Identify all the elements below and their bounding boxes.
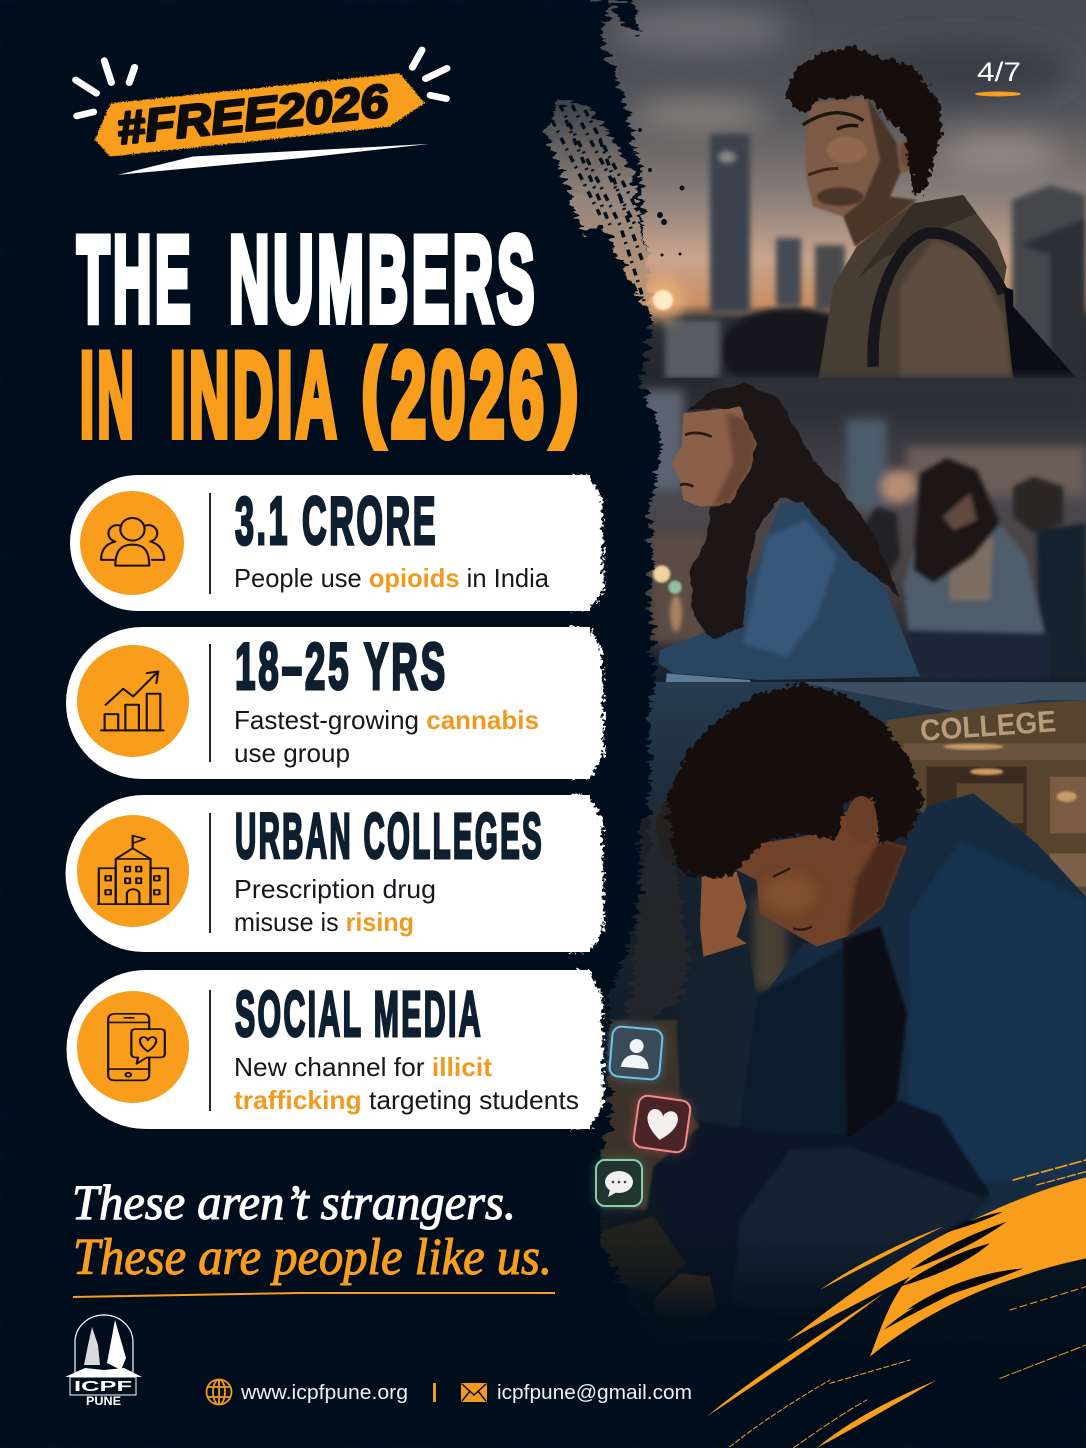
photo: young woman and friends <box>600 377 1086 710</box>
divider <box>209 813 211 933</box>
website: www.icpfpune.org <box>240 1382 408 1404</box>
stat heading: 3.1 CRORE <box>235 483 438 559</box>
description: use group <box>234 738 350 768</box>
logo: ICPF Pune <box>65 1315 142 1408</box>
title: NUMBERS <box>229 211 538 347</box>
divider <box>209 644 211 762</box>
separator <box>433 1383 436 1402</box>
description: trafficking targeting students <box>234 1085 579 1115</box>
icon: envelope <box>461 1383 487 1402</box>
hair <box>687 383 900 640</box>
title line 2: ( <box>362 327 385 448</box>
card: 18-25 yrs <box>66 627 604 779</box>
text: page number: 4/7 <box>977 57 1021 87</box>
description <box>234 874 436 937</box>
icon: neon profile <box>609 1026 663 1080</box>
blurred friends <box>1037 523 1086 677</box>
arm and hand <box>700 872 747 957</box>
hoodie <box>818 195 1078 380</box>
title line 2: ) <box>552 327 578 448</box>
tagline <box>72 1174 555 1298</box>
hashtag text: #FREE2026 <box>114 74 391 154</box>
logo subtext: PUNE <box>86 1394 121 1408</box>
description: Fastest-growing cannabis <box>234 705 539 735</box>
title line 1: THE <box>77 211 194 347</box>
stat heading: 18–25 YRS <box>235 629 448 703</box>
icon: college building <box>77 815 189 927</box>
icon: growth chart <box>77 645 189 757</box>
text: college sign: COLLEGE <box>919 705 1057 748</box>
orange brush stroke <box>707 1160 1086 1448</box>
face <box>805 97 925 247</box>
light brush band <box>800 682 1086 712</box>
face <box>672 407 757 507</box>
card: urban colleges <box>66 795 604 952</box>
title line 2: INDIA <box>170 328 340 462</box>
light brush wedge <box>545 100 652 320</box>
description <box>234 705 539 768</box>
description: Prescription drug <box>234 874 436 904</box>
tagline line 1: These aren’t strangers. <box>72 1174 516 1230</box>
hair <box>653 683 923 877</box>
title line 1 <box>77 211 538 347</box>
icon: neon heart <box>633 1095 691 1153</box>
title line 2: 2026 <box>391 328 548 462</box>
title line 2: IN <box>80 328 137 462</box>
rays <box>76 50 447 116</box>
tagline underline <box>73 1292 555 1298</box>
description: misuse is rising <box>234 907 414 937</box>
jacket <box>658 503 920 680</box>
brush speckle <box>552 105 650 320</box>
card: social media <box>66 970 604 1129</box>
footer contacts <box>206 1380 692 1404</box>
icon: people <box>80 491 184 595</box>
hoodie <box>677 793 1086 1220</box>
face <box>730 797 907 947</box>
icon: neon chat <box>596 1160 642 1206</box>
card: 3.1 crore <box>70 475 604 611</box>
icon: globe <box>206 1380 232 1404</box>
underline swoosh <box>118 144 430 175</box>
description <box>234 1052 579 1115</box>
logo text: ICPF <box>74 1378 132 1395</box>
email: icpfpune@gmail.com <box>497 1382 692 1404</box>
title <box>77 211 578 462</box>
tagline line 2: These are people like us. <box>73 1229 552 1286</box>
description: New channel for illicit <box>234 1052 492 1082</box>
college building <box>887 700 1086 897</box>
divider <box>209 990 211 1111</box>
card: urban colleges: URBAN COLLEGES <box>235 800 544 872</box>
photo: stressed student outside college <box>590 682 1086 1350</box>
sleeve <box>677 940 757 1160</box>
lower body <box>590 1020 990 1337</box>
hashtag badge <box>76 50 447 175</box>
page number underline <box>975 92 1021 96</box>
description: People use opioids in India <box>234 563 550 593</box>
photo: young man looking at skyline <box>590 0 1086 392</box>
hair <box>785 47 942 193</box>
texture between cards and third photo <box>625 800 690 1050</box>
card: social media: SOCIAL MEDIA <box>235 978 483 1050</box>
icon: phone with heart bubble <box>77 991 189 1103</box>
divider <box>209 493 211 594</box>
hashtag brush stroke <box>95 73 425 157</box>
